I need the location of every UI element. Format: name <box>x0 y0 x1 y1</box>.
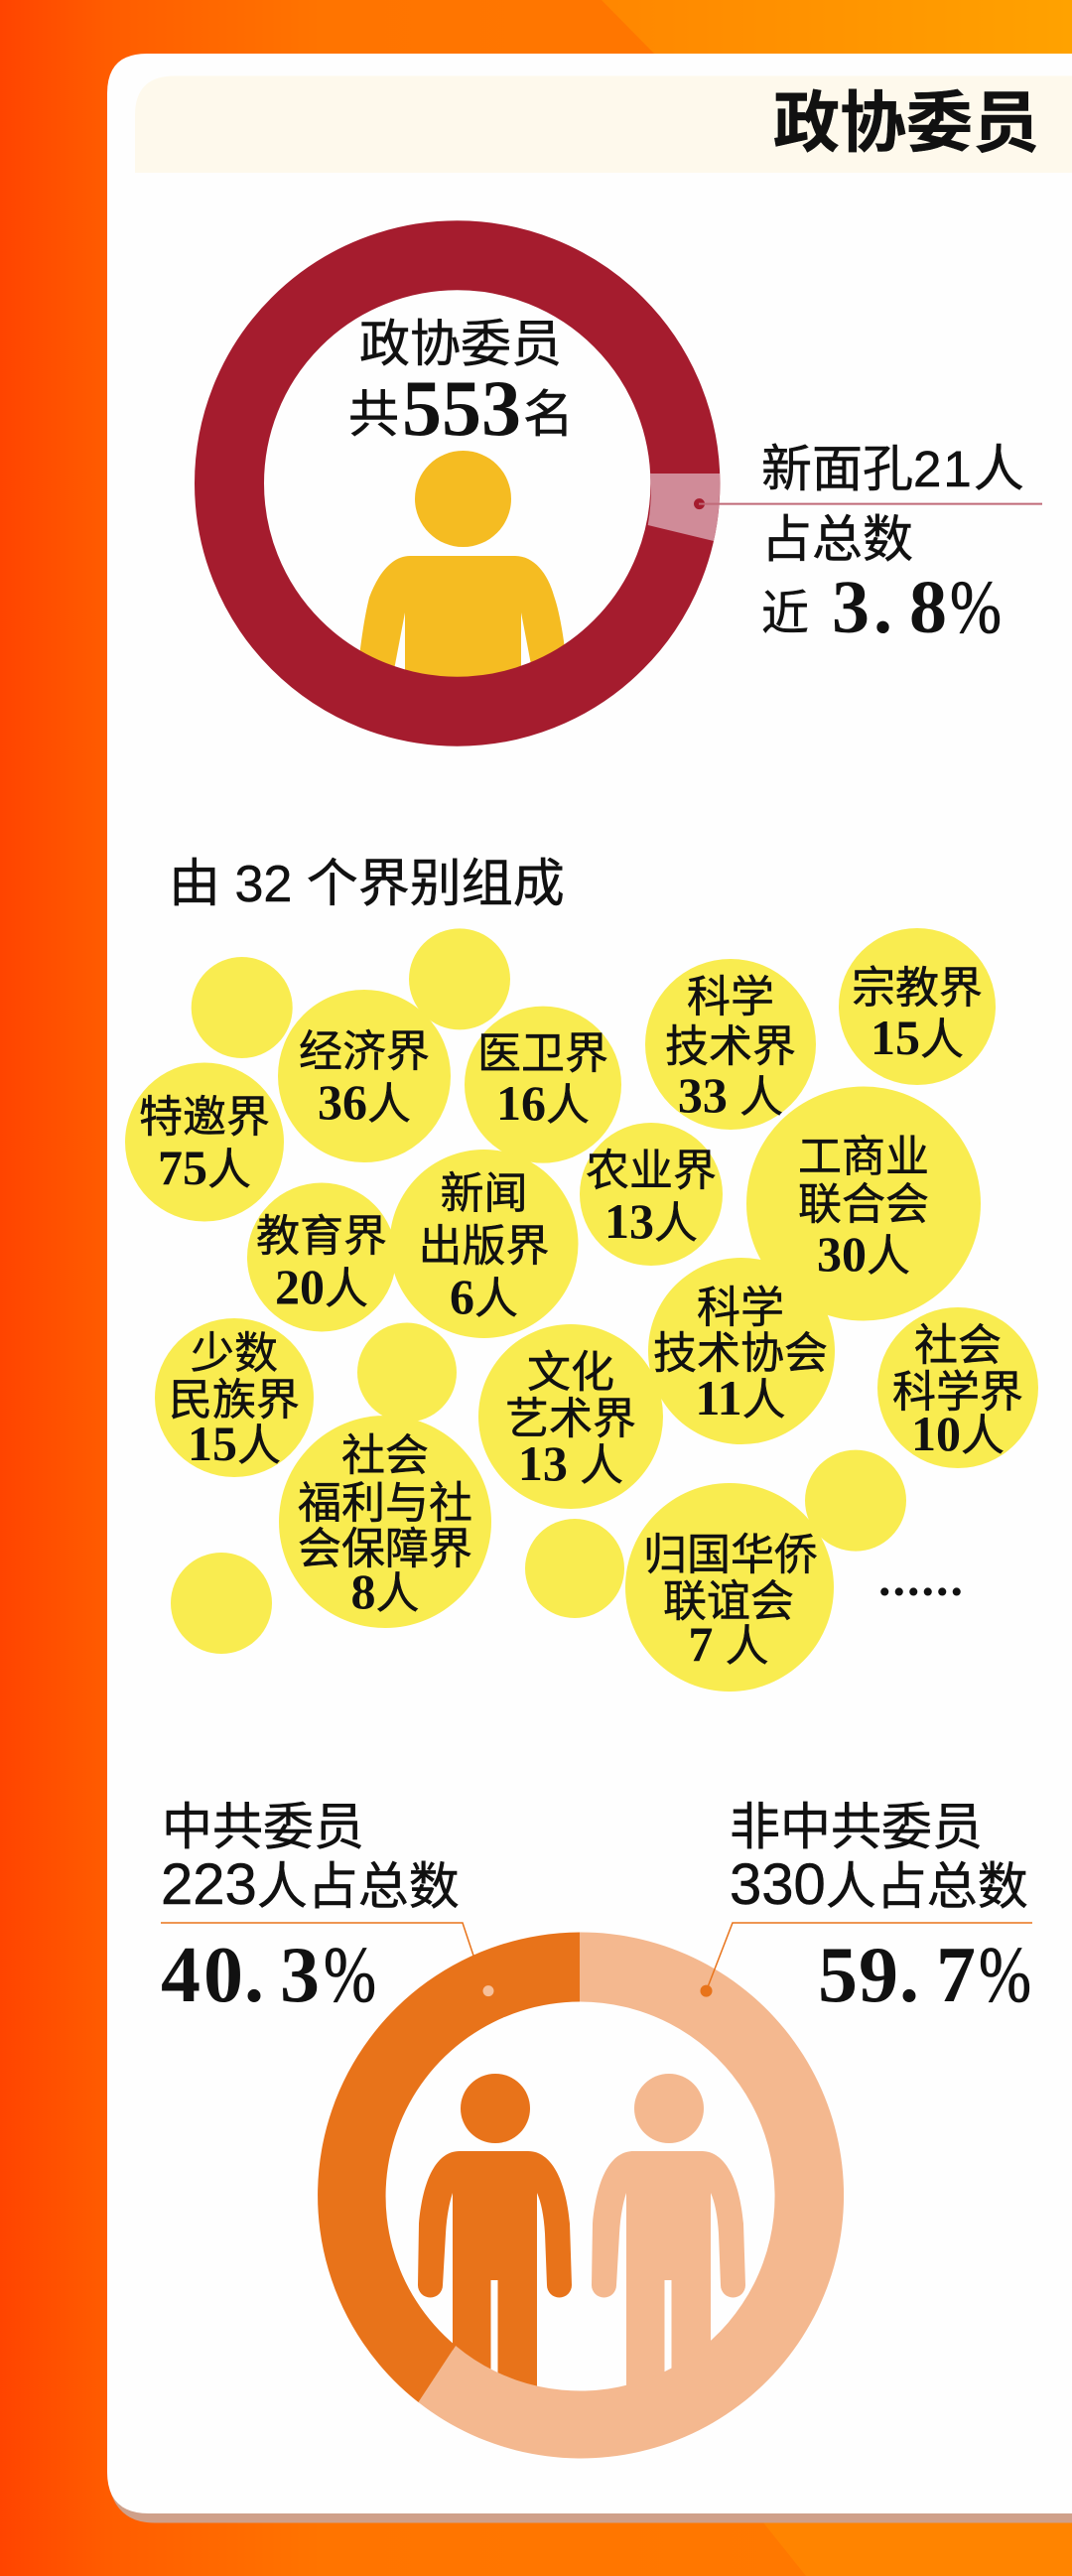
bubble: social sciences: 社会 <box>914 1321 1002 1370</box>
callout: party members: 40.3 <box>161 1932 320 2019</box>
chart: total members donut <box>229 255 720 712</box>
donut centre label: 政协委员 <box>359 316 562 372</box>
callout: new members <box>694 441 1042 649</box>
bubble: industry and commerce: 30人 <box>817 1226 910 1282</box>
header band <box>135 75 1072 173</box>
callout: party members: % <box>324 1932 376 2019</box>
bubble: news and publishing <box>389 1150 578 1338</box>
bubble: science association <box>648 1258 835 1444</box>
icon: person light <box>592 2074 745 2402</box>
bubble: social welfare: 会保障界 <box>298 1525 472 1573</box>
donut centre label <box>348 316 574 453</box>
title: 政协委员 <box>773 86 1039 161</box>
ring segment: non-party <box>419 1932 844 2458</box>
bubble: education: 20人 <box>275 1259 368 1314</box>
bubble: science association: 11人 <box>695 1370 786 1425</box>
bubble: social welfare: 8人 <box>351 1563 419 1619</box>
bubble: industry and commerce: 联合会 <box>798 1180 929 1229</box>
bubble: social sciences: 10人 <box>911 1406 1005 1461</box>
bubble: agriculture: 13人 <box>604 1193 698 1249</box>
bubble: religion: 15人 <box>871 1010 964 1065</box>
bubble: culture and arts: 艺术界 <box>505 1395 636 1443</box>
donut centre label: 共 <box>348 386 399 443</box>
bubble: social welfare <box>279 1416 491 1628</box>
bubble: news and publishing: 6人 <box>450 1269 518 1324</box>
callout: party members: 223人占总数 <box>161 1852 460 1917</box>
callout: non-party members: % <box>979 1932 1031 2019</box>
bubble: agriculture <box>580 1123 723 1266</box>
bubble: returned overseas Chinese: 联谊会 <box>663 1577 794 1626</box>
bubble: specially invited <box>125 1062 284 1221</box>
bubble: culture and arts <box>478 1324 663 1509</box>
bubble: economy: 经济界 <box>299 1027 430 1076</box>
callout: new members: 占总数 <box>761 511 913 568</box>
bubble: returned overseas Chinese: 归国华侨 <box>643 1531 818 1579</box>
bubble: industry and commerce: 工商业 <box>798 1133 929 1181</box>
bubble: industry and commerce <box>746 1086 981 1320</box>
bubble: culture and arts: 文化 <box>527 1348 614 1397</box>
bubble: specially invited: 特邀界 <box>139 1093 270 1142</box>
bubble: culture and arts: 13 人 <box>518 1435 623 1491</box>
bubble: specially invited: 75人 <box>158 1140 251 1195</box>
icon: person dark <box>418 2074 572 2402</box>
bubble: education <box>247 1183 396 1332</box>
bubble: news and publishing: 出版界 <box>419 1222 550 1271</box>
chart: sector bubbles <box>125 928 1038 1692</box>
callout: new members: 新面孔21人 <box>761 441 1024 497</box>
bubble: social sciences: 科学界 <box>892 1368 1023 1417</box>
bubble: ethnic minorities: 少数 <box>191 1329 278 1378</box>
bubble: medical: 16人 <box>496 1075 590 1131</box>
donut ring <box>229 255 685 712</box>
bubble: returned overseas Chinese <box>625 1483 834 1692</box>
callout: non-party members <box>701 1799 1032 2019</box>
bubble: social welfare: 社会 <box>341 1431 429 1480</box>
bubble: ethnic minorities: 15人 <box>188 1416 281 1471</box>
bubble: science association: 技术协会 <box>653 1329 828 1378</box>
bubble: social welfare: 福利与社 <box>298 1479 472 1528</box>
bubble: returned overseas Chinese: 7 人 <box>688 1616 769 1672</box>
bubble: science and technology: 技术界 <box>665 1022 796 1071</box>
bubble: science and technology: 33 人 <box>678 1067 783 1123</box>
bubble: agriculture: 农业界 <box>586 1147 717 1195</box>
bubble: science and technology: 科学 <box>687 973 774 1021</box>
bubble: religion: 宗教界 <box>852 964 983 1013</box>
bubble: science and technology <box>645 959 816 1130</box>
new members segment <box>648 474 720 541</box>
bubble: education: 教育界 <box>256 1212 387 1261</box>
callout: party members <box>161 1799 494 2019</box>
bubble: science association: 科学 <box>697 1284 784 1332</box>
chart: party membership donut <box>318 1932 844 2458</box>
callout: new members: 近 <box>761 588 809 640</box>
blank bubbles <box>171 928 906 1654</box>
callout: non-party members: 330人占总数 <box>730 1852 1028 1917</box>
bubble: economy <box>278 990 451 1162</box>
donut centre label: 553 <box>402 365 521 453</box>
bubble: medical: 医卫界 <box>477 1029 608 1078</box>
callout: non-party members: 59.7 <box>818 1932 976 2019</box>
icon: person <box>357 451 568 695</box>
bubble: medical <box>465 1007 621 1163</box>
bubble: economy: 36人 <box>318 1074 411 1130</box>
callout: new members: % <box>950 566 1002 649</box>
bubble: ethnic minorities <box>155 1318 314 1477</box>
bubble: news and publishing: 新闻 <box>441 1169 528 1218</box>
donut centre label: 名 <box>523 386 574 443</box>
bubble: ethnic minorities: 民族界 <box>169 1376 300 1424</box>
heading: sectors: 由 32 个界别组成 <box>169 856 565 913</box>
ring segment: party <box>318 1932 580 2402</box>
ellipsis: ...... <box>878 1551 963 1606</box>
bubble: religion <box>839 928 996 1085</box>
callout: party members: 中共委员 <box>162 1799 364 1855</box>
bubble: social sciences <box>877 1307 1038 1468</box>
callout: non-party members: 非中共委员 <box>730 1799 983 1855</box>
callout: new members: 3.8 <box>832 566 947 649</box>
